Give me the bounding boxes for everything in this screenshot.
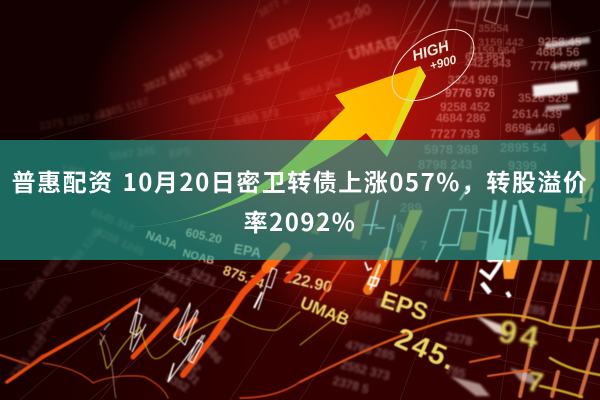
lower grey number blocks: 2552 373: [339, 357, 392, 383]
number columns at upper right: 2159 664: [470, 45, 517, 57]
ticker labels: 875.34 and 122.90: 122.90: [282, 268, 334, 297]
numbers beneath the band tint: 289: [400, 200, 422, 215]
faint red data at left of band: [59, 145, 192, 259]
orange candle bodies lower right: [390, 255, 597, 396]
number columns at upper right: 4422 943: [465, 58, 511, 70]
lower grey number blocks: 233: [540, 269, 562, 286]
number columns at upper right: 4684 286: [436, 111, 486, 125]
faint data rows at upper centre: 2455 672: [303, 104, 350, 128]
faint data rows at upper centre: 122.90: [325, 1, 374, 34]
numbers beneath the band tint: [396, 140, 548, 253]
lower grey number blocks: 5231: [176, 362, 202, 387]
green ticker labels under the band: 605.20: [184, 225, 224, 247]
number columns at upper right: 35554: [478, 23, 509, 35]
banner band: [0, 140, 600, 260]
lower grey number blocks: 4705: [424, 285, 454, 305]
ticker labels: 875.34 and 122.90: [221, 262, 334, 297]
blurred data at lower left: 2365 4435: [8, 333, 49, 382]
ticker labels: UMAB, EPS, 245: [298, 286, 462, 378]
lower grey number blocks: 2378: [444, 329, 474, 349]
blurred yellow digits lower right: 94: [496, 313, 546, 357]
lower grey number blocks: 642: [183, 353, 203, 375]
lower grey number blocks: 6374: [374, 295, 404, 315]
number columns at upper right: 3526 529: [518, 91, 568, 105]
callout: HIGH +900 ellipse: HIGH: [410, 37, 452, 65]
faint data rows at upper centre: 3822 441: [142, 66, 189, 95]
blurred data at lower left: [8, 225, 104, 382]
number columns at upper right: 7774 579: [530, 59, 580, 73]
faint red data at left of band: 5547 245: [109, 145, 156, 163]
lower grey number blocks: 5586: [353, 307, 383, 327]
number columns at upper right: 9776 976: [445, 86, 495, 100]
faint data rows at upper centre: 2375 1287 443: [38, 108, 113, 133]
bright white labels upper right: [450, 1, 590, 135]
white candles inside band, right: [362, 185, 530, 262]
faint data rows at upper centre: 2385 1187: [98, 96, 150, 121]
lower grey number blocks: 2378 5: [331, 373, 371, 396]
title: 普惠配资 10月20日密卫转债上涨057%，转股溢价: [12, 163, 588, 198]
ticker labels: UMAB, EPS, 245: EPS: [377, 286, 431, 327]
green ticker labels under the band: NAJA: [144, 228, 180, 252]
blurred yellow digits lower right: 7: [525, 365, 546, 399]
icon: rising arrow: [127, 66, 426, 227]
faint red data at left of band: 6545 318: [89, 207, 136, 235]
line charts lower section: [43, 310, 600, 398]
blurred data at lower left: 5234 3375: [33, 293, 74, 342]
lower grey number blocks: 5231: [189, 265, 219, 289]
faint red data at left of band: 3255 1245: [94, 226, 146, 259]
faint red data at left of band: EPS: [168, 145, 192, 161]
faint data rows at upper centre: 6544 338: [188, 84, 235, 108]
lower grey number blocks: 785: [444, 362, 467, 381]
orange price bars lower left: [0, 248, 478, 382]
numbers beneath the band tint: 2895 54: [500, 140, 548, 155]
faint data rows at upper centre: EBR: [265, 25, 303, 54]
numbers beneath the band tint: 9: [396, 220, 403, 235]
dark right band edge: [575, 200, 600, 258]
lower grey number blocks: 3045: [148, 280, 179, 306]
number columns at upper right: 7727 793: [430, 127, 480, 141]
ticker labels: UMAB, EPS, 245: UMAB: [298, 293, 352, 330]
lower grey number blocks: 3864: [411, 264, 441, 284]
faint data rows at upper centre: S.35.84: [241, 58, 292, 88]
green ticker labels under the band: EPA: [232, 240, 263, 261]
white candlesticks lower left: [100, 268, 277, 382]
ticker labels: UMAB, EPS, 245: 245.: [390, 322, 462, 378]
number columns at upper right: 3159 442: [478, 37, 524, 49]
orange candle bodies inside band: [311, 118, 600, 260]
faint data rows at upper centre: [38, 0, 537, 133]
faint data rows at upper centre: 3554 262: [297, 76, 344, 103]
faint data rows at upper centre: 4455 325: [166, 50, 213, 81]
lower grey number blocks: 2313: [164, 265, 194, 289]
callout: HIGH +900 ellipse: +900: [428, 52, 458, 73]
blurred yellow digits lower right: [496, 313, 546, 399]
title: [12, 163, 588, 238]
number columns at upper right: 9258 452: [440, 100, 490, 114]
lower grey number blocks: 543: [210, 323, 232, 344]
lower grey number blocks: 686: [203, 344, 224, 366]
number columns at upper right: 8696 446: [505, 121, 555, 135]
lower grey number blocks: 5352: [164, 372, 191, 395]
green ticker labels under the band: [144, 225, 263, 267]
lower grey number blocks: [138, 264, 562, 396]
top blurred candles: [395, 0, 533, 55]
faint data rows at upper centre: ASLJ: [196, 48, 226, 73]
blurred data at lower left: 3255 1245: [63, 225, 104, 274]
numbers beneath the band tint: 9399: [508, 158, 537, 173]
number columns at upper right: 4684 56: [536, 45, 580, 59]
ticker labels: 875.34 and 122.90: 875.34: [221, 262, 267, 292]
numbers beneath the band tint: 8798 243: [418, 157, 472, 172]
faint data rows at upper centre: 6455 372: [233, 107, 281, 128]
numbers beneath the band tint: 7: [420, 238, 427, 253]
numbers beneath the band tint: 5978 368: [424, 142, 478, 157]
lower grey number blocks: 3854: [138, 302, 169, 328]
faint data rows at upper centre: UMAB: [346, 32, 400, 64]
number columns at upper right: 634 664: [465, 51, 506, 63]
title: 率2092%: [244, 203, 356, 238]
white candles at bottom edge of band: [365, 258, 510, 297]
number columns at upper right: 3324 969: [448, 73, 498, 87]
faint red data at left of band: 1355 224: [59, 163, 108, 183]
blurred white highlights lower right: [450, 315, 538, 396]
number columns at upper right: 9258.45: [538, 35, 582, 49]
lower grey number blocks: 4768 285: [344, 337, 397, 363]
green ticker labels under the band: NOAB: [181, 247, 216, 267]
blurred data at lower left: 2356 4565: [23, 253, 64, 302]
lower grey number blocks: 285: [524, 301, 547, 318]
number columns at upper right: [430, 23, 582, 141]
number columns at upper right: 2614 439: [512, 107, 562, 121]
callout: HIGH +900 ellipse: [379, 15, 487, 115]
